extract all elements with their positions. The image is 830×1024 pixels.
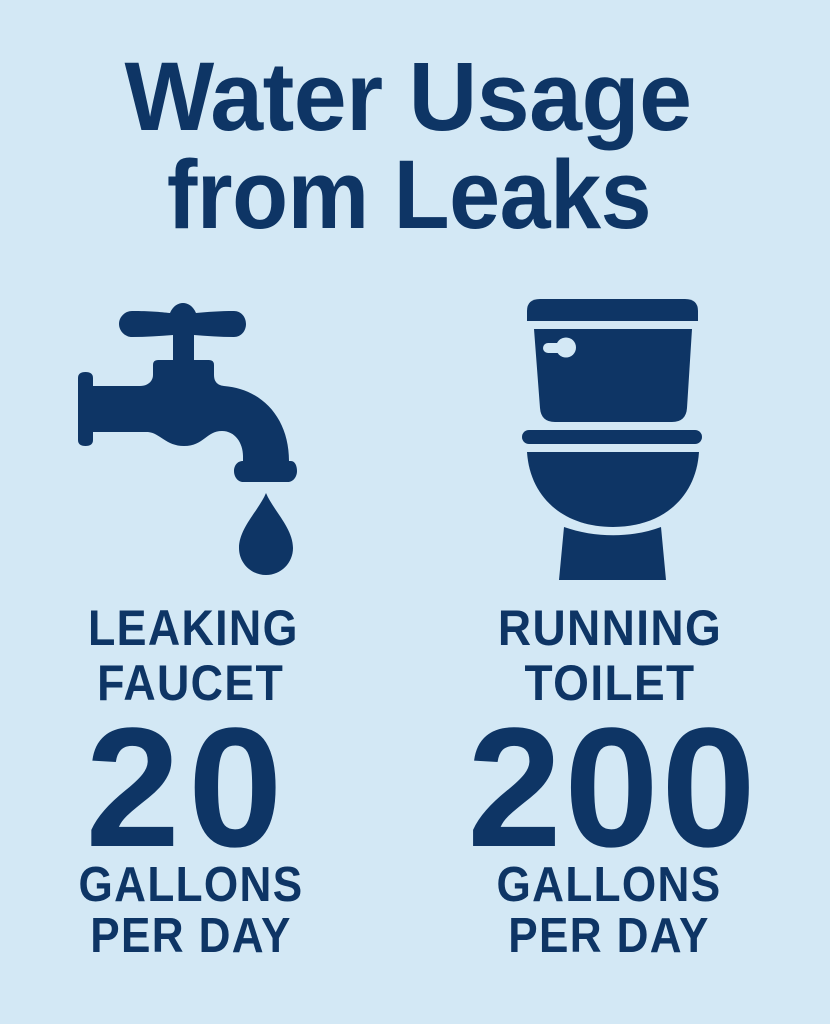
unit: gallons per day, toilet	[496, 858, 721, 963]
label: running toilet: TOILET	[525, 655, 695, 711]
number: 20: 20	[85, 693, 291, 883]
unit: gallons per day, faucet	[78, 858, 303, 963]
label: leaking faucet: LEAKING	[87, 600, 298, 656]
number: 200: 200	[467, 693, 758, 883]
unit: gallons per day, toilet: PER DAY	[508, 909, 709, 963]
title: Water Usage	[124, 42, 691, 151]
label: leaking faucet: FAUCET	[97, 655, 284, 711]
unit: gallons per day, faucet: PER DAY	[90, 909, 291, 963]
title: from Leaks	[167, 140, 651, 249]
unit: gallons per day, faucet: GALLONS	[78, 858, 303, 912]
label: leaking faucet	[87, 600, 298, 711]
label: running toilet	[498, 600, 722, 711]
unit: gallons per day, toilet: GALLONS	[496, 858, 721, 912]
title	[124, 42, 691, 249]
label: running toilet: RUNNING	[498, 600, 722, 656]
